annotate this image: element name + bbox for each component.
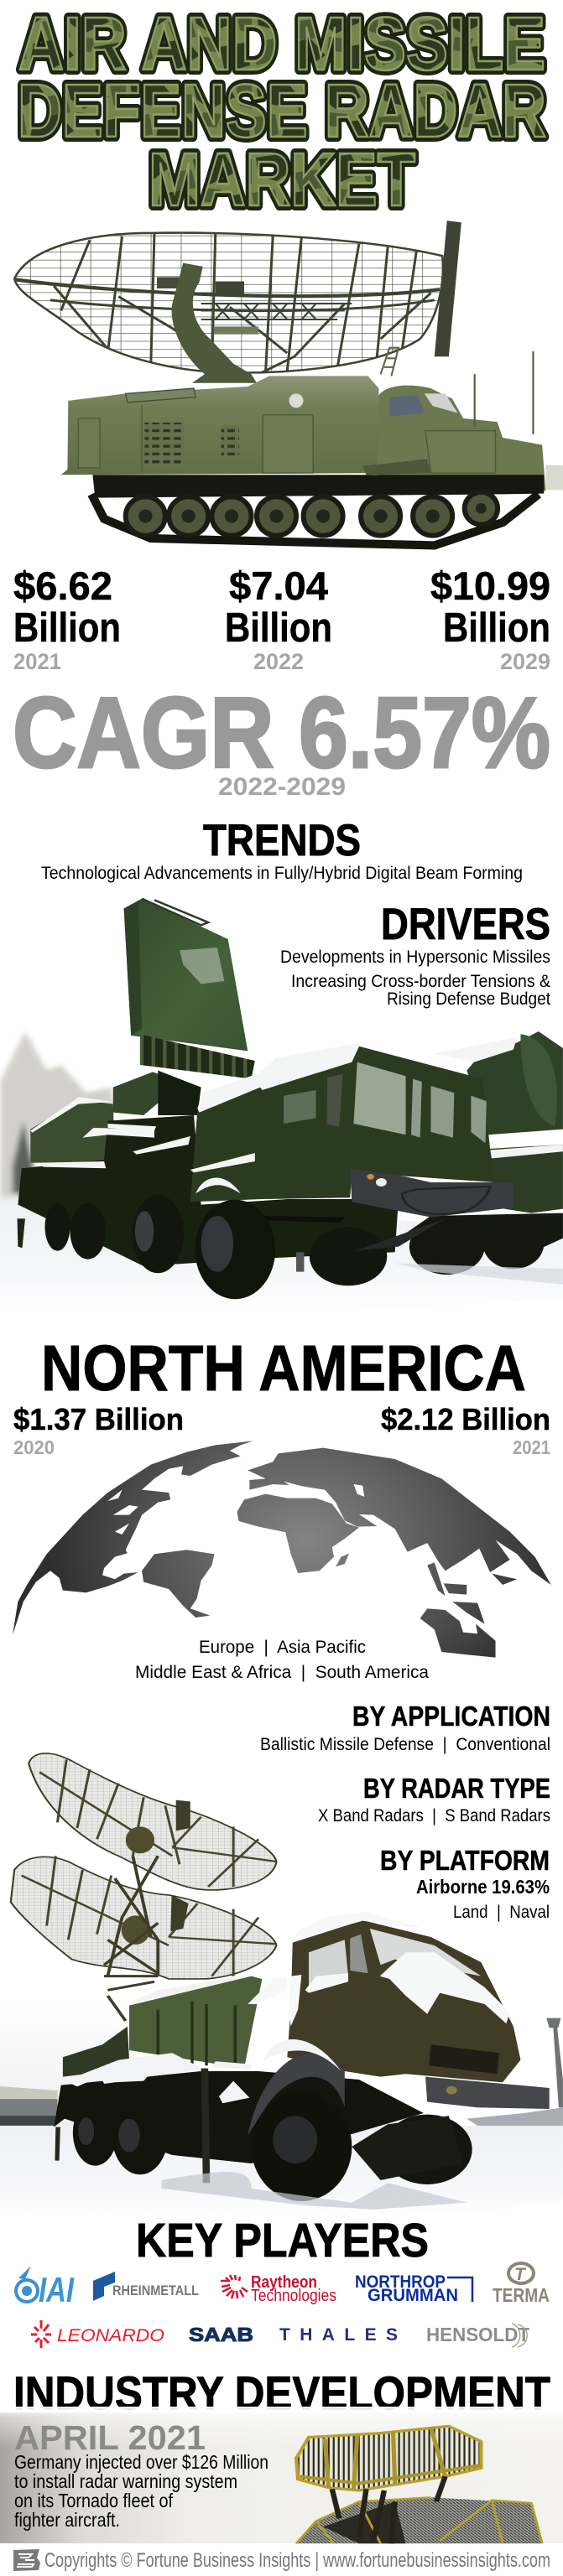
wheels — [55, 2069, 472, 2201]
other regions: Middle East & Africa | South America — [135, 1663, 429, 1682]
australia land — [420, 1608, 496, 1658]
southeast asia islands — [427, 1562, 517, 1624]
cab windows — [284, 1062, 487, 1143]
logo: Leonardo: LEONARDO — [57, 2326, 164, 2345]
logo: Thales: THALES — [279, 2325, 398, 2345]
chassis — [18, 1115, 399, 1266]
other regions — [135, 1638, 429, 1682]
panel support rack — [140, 1034, 255, 1079]
smoke background — [0, 2412, 563, 2543]
front grille — [429, 2044, 499, 2074]
snow shadows — [162, 2172, 467, 2210]
other regions: Europe | Asia Pacific — [199, 1638, 366, 1657]
front bumper — [258, 1168, 513, 1223]
logo: Saab: SAAB — [189, 2324, 253, 2345]
cab snow — [248, 1912, 510, 2027]
radar support arm — [172, 263, 257, 383]
upper radar dish — [29, 1753, 276, 1890]
radar tracked vehicle photo — [11, 221, 563, 545]
logo: Raytheon Technologies: Technologies — [251, 2287, 336, 2305]
logo: Northrop Grumman: NORTHROP — [355, 2272, 446, 2292]
title — [18, 3, 546, 222]
exhaust and antenna — [475, 351, 533, 434]
support legs — [332, 2476, 446, 2543]
development text: Germany injected over $126 Million — [14, 2451, 268, 2473]
lower radar dish — [11, 1856, 276, 1979]
cab windows — [309, 1929, 481, 1986]
development text — [14, 2451, 268, 2531]
rear shelter — [30, 1100, 115, 1163]
drivers list — [280, 948, 550, 1009]
industry development panel — [0, 2407, 563, 2543]
body vents and doors — [78, 388, 496, 475]
cab snow — [190, 1042, 361, 1193]
vehicle body — [61, 376, 378, 475]
logo: Raytheon Technologies — [221, 2273, 336, 2305]
lakes and seas — [107, 1482, 364, 1535]
regional value 2020 — [13, 1402, 184, 1458]
market value 2021 — [13, 564, 121, 674]
lattice mast — [104, 1856, 158, 2021]
april 2021: APRIL 2021 — [14, 2418, 206, 2457]
market value 2022 — [225, 564, 332, 674]
market value 2022: Billion — [225, 605, 332, 651]
africa land — [237, 1494, 359, 1573]
by platform — [380, 1845, 550, 1922]
drivers list: Increasing Cross-border Tensions & — [291, 972, 550, 991]
building — [0, 2086, 57, 2126]
by radar type — [318, 1773, 550, 1826]
market value 2021: 2021 — [13, 649, 61, 674]
regional value 2020: 2020 — [13, 1436, 55, 1458]
trends text: Technological Advancements in Fully/Hybrid Digital Beam Forming — [41, 864, 523, 883]
market value 2029: $10.99 — [430, 564, 550, 608]
market value 2021: $6.62 — [13, 564, 112, 608]
array frame — [300, 2428, 481, 2489]
background truck — [395, 1031, 563, 1285]
icon: fortune business insights logo — [13, 2549, 40, 2571]
ladder — [381, 348, 399, 376]
front grille box — [545, 465, 563, 490]
title: MARKET — [149, 138, 415, 222]
logo: Northrop Grumman — [355, 2272, 472, 2305]
market value 2021: Billion — [13, 605, 121, 651]
development text: on its Tornado fleet of — [14, 2490, 174, 2511]
tracks — [91, 475, 544, 545]
logo: Leonardo — [31, 2320, 164, 2348]
yellow radar photo — [296, 2426, 542, 2543]
logo: IAI: IAI — [39, 2270, 75, 2309]
radar feed horn — [435, 221, 461, 356]
title: MARKET — [149, 138, 415, 222]
logo: Hensoldt: HENSOLDT — [426, 2324, 529, 2345]
regional value 2021: $2.12 Billion — [381, 1402, 550, 1436]
outrigger — [18, 1218, 25, 1248]
main cab — [190, 1046, 496, 1202]
lower dish — [296, 2497, 542, 2543]
madagascar — [336, 1554, 349, 1566]
regional value 2021 — [381, 1402, 550, 1458]
key players heading: KEY PLAYERS — [136, 2214, 429, 2267]
chassis snow — [65, 2053, 252, 2103]
eurasia land — [248, 1448, 551, 1585]
logo: Raytheon Technologies: Raytheon — [251, 2273, 317, 2292]
chassis — [54, 2071, 424, 2163]
snow ground — [0, 2126, 563, 2218]
parked aircraft — [467, 2107, 563, 2127]
logo: Northrop Grumman: GRUMMAN — [368, 2286, 458, 2305]
footer — [13, 2549, 550, 2572]
development text: to install radar warning system — [14, 2470, 237, 2492]
logo: Terma — [493, 2263, 550, 2306]
logo: Terma: T — [514, 2265, 527, 2284]
cab window — [389, 396, 425, 417]
by platform: Airborne 19.63% — [416, 1876, 550, 1898]
north america land — [13, 1441, 253, 1635]
phased array panel — [124, 899, 248, 1051]
snow ground — [0, 1197, 563, 1314]
south america land — [142, 1550, 214, 1618]
market value 2029: 2029 — [500, 649, 550, 674]
truck cab — [287, 1920, 520, 2082]
by platform: Land | Naval — [453, 1903, 550, 1922]
development text: fighter aircraft. — [14, 2509, 120, 2531]
globe map — [13, 1441, 551, 1658]
sky haze — [0, 2004, 137, 2127]
drivers list: Rising Defense Budget — [387, 989, 550, 1009]
logo: IAI — [16, 2266, 75, 2309]
lamp post — [546, 2018, 563, 2107]
vehicle cab — [377, 386, 545, 491]
regional value 2020: $1.37 Billion — [13, 1402, 184, 1436]
equipment box — [113, 1072, 165, 1115]
logo: Rheinmetall — [93, 2272, 199, 2301]
logo: Terma: TERMA — [493, 2284, 550, 2306]
road wheels — [126, 492, 498, 536]
market value 2029 — [430, 564, 550, 674]
snow radar truck photo — [0, 899, 563, 1314]
large wheels — [44, 1195, 446, 1299]
upper array — [296, 2426, 481, 2490]
front bumper — [425, 2077, 550, 2109]
market value 2022: 2022 — [253, 649, 304, 674]
CAGR period: 2022-2029 — [218, 773, 346, 801]
smoke fade — [0, 2407, 563, 2543]
trends heading: TRENDS — [203, 816, 361, 865]
equipment cabin — [63, 1976, 262, 2077]
market value 2022: $7.04 — [229, 564, 328, 608]
radar dish mesh — [11, 233, 443, 374]
logo: Rheinmetall: RHEINMETALL — [112, 2283, 199, 2298]
winter trees — [0, 1031, 115, 1197]
front fender — [248, 2054, 345, 2136]
regional value 2021: 2021 — [513, 1436, 550, 1458]
dual radar truck photo — [0, 1753, 563, 2218]
by application — [260, 1701, 550, 1754]
